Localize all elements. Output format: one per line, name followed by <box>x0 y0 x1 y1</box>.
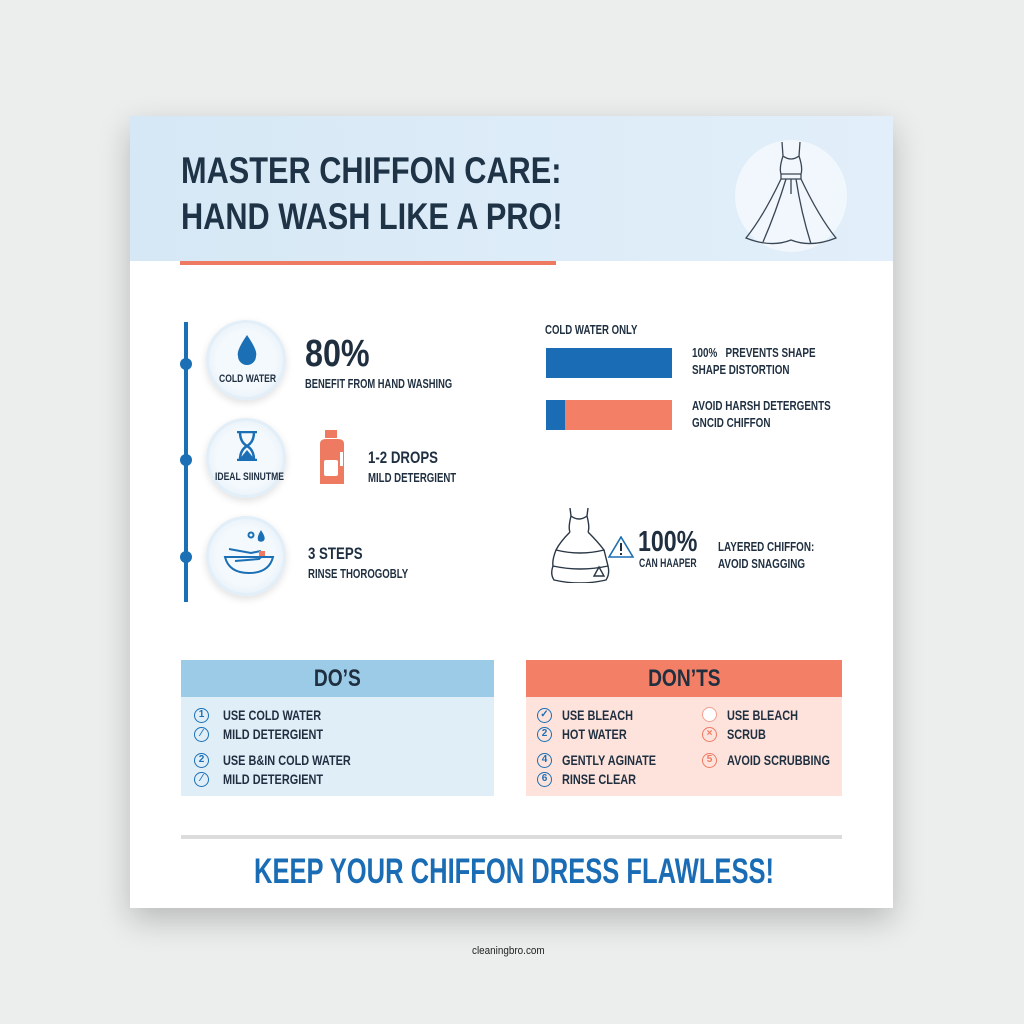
bar chart: 100% PREVENTS SHAPE <box>692 345 816 360</box>
divider <box>181 835 842 839</box>
timeline <box>184 322 188 602</box>
heading: do's <box>181 660 494 697</box>
panel: don'ts: 4 <box>542 754 547 765</box>
source credit: cleaningbro.com <box>472 945 545 957</box>
bar chart: SHAPE DISTORTION <box>692 362 790 377</box>
circle: hands washing <box>206 516 286 596</box>
stat: 100% layered: 100% <box>638 526 697 558</box>
panel: don'ts: SCRUB <box>727 726 766 742</box>
panel: don'ts: AVOID SCRUBBING <box>727 752 830 768</box>
icon: detergent bottle <box>320 430 344 484</box>
panel: do's: ⁄ <box>201 728 202 739</box>
header band <box>130 116 893 261</box>
stat: 80%: 80% <box>305 333 370 375</box>
card <box>130 116 893 908</box>
heading: do's: DO’S <box>314 665 361 692</box>
panel: don'ts: 5 <box>707 754 712 765</box>
panel: do's: ⁄ <box>201 773 202 784</box>
panel: do's <box>181 660 494 796</box>
stat: 100% layered: LAYERED CHIFFON: <box>718 539 814 554</box>
footer slogan: KEEP YOUR CHIFFON DRESS FLAWLESS! <box>254 852 774 891</box>
stat: 1-2 drops: 1-2 DROPS <box>368 448 438 467</box>
panel: don'ts: 2 <box>542 728 547 739</box>
title: HAND WASH LIKE A PRO! <box>181 196 563 237</box>
panel: don'ts: 6 <box>542 773 547 784</box>
circle: ideal time: IDEAL SIINUTME <box>215 471 284 483</box>
stat: 80%: BENEFIT FROM HAND WASHING <box>305 376 452 391</box>
icon: layered dress <box>551 508 610 583</box>
stat: 80% <box>305 333 452 391</box>
stat: 3 steps: RINSE THOROGOBLY <box>308 566 408 581</box>
bar chart <box>545 322 831 430</box>
heading: don'ts <box>526 660 842 697</box>
circle: cold water <box>206 320 286 400</box>
bar chart: COLD WATER ONLY <box>545 322 637 337</box>
bar chart: GNCID CHIFFON <box>692 415 770 430</box>
title underline <box>180 261 556 265</box>
panel: do's: 1 <box>199 709 204 720</box>
bar chart: AVOID HARSH DETERGENTS <box>692 398 831 413</box>
circle: ideal time <box>206 418 286 498</box>
panel: don'ts: USE BLEACH <box>562 707 633 723</box>
stat: 100% layered: AVOID SNAGGING <box>718 556 805 571</box>
stat: 3 steps <box>308 544 408 581</box>
stat: 1-2 drops <box>368 448 456 485</box>
panel: do's: 2 <box>199 754 204 765</box>
panel: don'ts <box>526 660 842 796</box>
heading: don'ts: DON’TS <box>648 665 720 692</box>
stat: 100% layered <box>608 526 814 571</box>
title <box>181 150 563 237</box>
panel: don'ts: GENTLY AGINATE <box>562 752 656 768</box>
circle: cold water: COLD WATER <box>219 373 276 385</box>
title: MASTER CHIFFON CARE: <box>181 150 561 191</box>
panel: do's: USE COLD WATER <box>223 707 321 723</box>
panel: don'ts: ✓ <box>540 709 549 720</box>
stat: 3 steps: 3 STEPS <box>308 544 363 563</box>
panel: don'ts: HOT WATER <box>562 726 627 742</box>
panel: do's: MILD DETERGIENT <box>223 771 323 787</box>
icon: dress in header <box>735 140 847 252</box>
panel: do's: MILD DETERGIENT <box>223 726 323 742</box>
stat: 100% layered: CAN HAAPER <box>639 556 697 570</box>
stat: 1-2 drops: MILD DETERGIENT <box>368 470 456 485</box>
panel: do's: USE B&IN COLD WATER <box>223 752 351 768</box>
panel: don'ts: USE BLEACH <box>727 707 798 723</box>
panel: don'ts: RINSE CLEAR <box>562 771 636 787</box>
panel: don'ts: × <box>707 728 712 739</box>
